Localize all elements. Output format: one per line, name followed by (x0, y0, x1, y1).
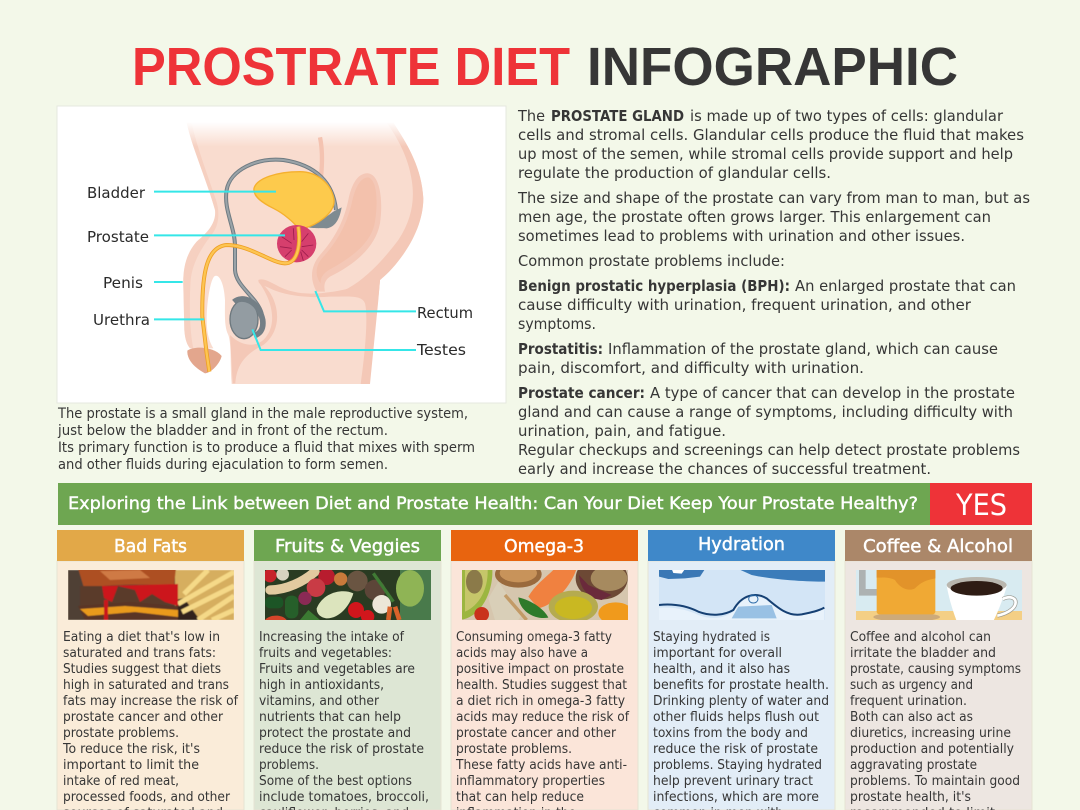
text: bad fats: To reduce the risk, it's (62, 742, 200, 757)
text: omega-3: health. Studies suggest that (456, 678, 627, 693)
text block: prostate gland description: pain, discomfort, and difficulty with urination. (518, 359, 864, 377)
text block: prostate gland description: Regular checkups and screenings can help detect prostate problems (518, 441, 1020, 459)
text block: prostate gland description: regulate the production of glandular cells. (518, 164, 831, 182)
text: bad fats: fats may increase the risk of (63, 694, 238, 709)
text block: prostate gland description: urination, pain, and fatigue. (518, 422, 726, 440)
anatomy labels: Bladder (87, 184, 146, 202)
text: omega-3: prostate problems. (456, 742, 572, 757)
text block: prostate caption: Its primary function is to produce a fluid that mixes with sperm (58, 440, 475, 456)
title: INFOGRAPHIC (587, 37, 958, 97)
text: omega-3 (455, 630, 629, 810)
vas deferens (226, 160, 336, 313)
text block: prostate gland description: The size and shape of the prostate can vary from man to man, but as (517, 189, 1030, 207)
anatomy labels: Rectum (417, 304, 473, 322)
ureter (320, 137, 322, 182)
text: hydration: Drinking plenty of water and (653, 694, 829, 709)
text: coffee and alcohol: frequent urination. (850, 694, 967, 709)
text: hydration: reduce the risk of prostate (653, 742, 818, 757)
text block: prostate caption: just below the bladder and in front of the rectum. (57, 423, 388, 439)
text: omega-3: a diet rich in omega-3 fatty (456, 694, 625, 709)
text block: prostate gland description: up most of the semen, while stromal cells provide support and help (518, 145, 1013, 163)
text block: prostate caption: and other fluids during ejaculation to form semen. (58, 457, 388, 473)
text: omega-3: These fatty acids have anti- (455, 758, 627, 773)
text: fruits and veggies: problems. (259, 758, 319, 773)
text: coffee and alcohol: production and potentially (850, 742, 1014, 757)
text: hydration: toxins from the body and (653, 726, 808, 741)
text block: prostate caption (57, 406, 475, 473)
text block: prostate gland description: cause difficulty with urination, frequent urination, and other (518, 296, 972, 314)
text: coffee and alcohol: diuretics, increasing urine (850, 726, 1011, 741)
text: hydration: help prevent urinary tract (653, 774, 813, 789)
text: bad fats: high in saturated and trans (63, 678, 229, 693)
text: hydration: problems. Staying hydrated (653, 758, 822, 773)
text: hydration: important for overall (653, 646, 782, 661)
anatomy labels: Urethra (93, 311, 150, 329)
heading: omega-3: Omega-3 (504, 537, 584, 557)
text: fruits and veggies: nutrients that can help (259, 710, 401, 725)
text: omega-3: acids may reduce the risk of (456, 710, 629, 725)
text: bad fats: prostate problems. (63, 726, 179, 741)
panel: anatomy diagram (57, 106, 506, 403)
text block: prostate gland description: A type of cancer that can develop in the prostate (650, 384, 1015, 402)
text block: prostate gland description: early and increase the chances of successful treatment. (518, 460, 931, 478)
text: bad fats: prostate cancer and other (63, 710, 224, 725)
illustration: male reproductive system (154, 123, 423, 384)
anatomy labels: Penis (103, 274, 143, 292)
text: bad fats (62, 630, 238, 810)
text: coffee and alcohol: Coffee and alcohol can (850, 630, 991, 645)
title: PROSTRATE DIET (132, 37, 570, 97)
text: hydration: benefits for prostate health. (653, 678, 829, 693)
bladder (254, 172, 334, 228)
testis (230, 300, 258, 339)
heading: coffee and alcohol: Coffee & Alcohol (863, 537, 1013, 557)
image: omega-3 foods (462, 570, 628, 620)
text: bad fats: important to limit the (63, 758, 199, 773)
banner: diet and prostate health question: YES (955, 488, 1007, 522)
text: fruits and veggies: reduce the risk of prostate (259, 742, 424, 757)
text block: prostate gland description: sometimes lead to problems with urination and other issues. (518, 227, 965, 245)
text: fruits and veggies: Fruits and vegetables are (259, 662, 415, 677)
text: bad fats: processed foods, and other (63, 790, 231, 805)
text: hydration (653, 630, 829, 810)
banner: diet and prostate health question: Exploring the Link between Diet and Prostate Health: Can Your Diet Keep Your Prostate Healthy? (68, 494, 918, 514)
text: fruits and veggies (259, 630, 429, 810)
heading: bad fats: Bad Fats (114, 537, 187, 557)
text: coffee and alcohol: Both can also act as (850, 710, 973, 725)
text block: prostate gland description: gland and can cause a range of symptoms, including difficulty with (518, 403, 1013, 421)
text block: prostate gland description: The (517, 107, 545, 125)
text: coffee and alcohol: such as urgency and (850, 678, 973, 693)
image: beer and coffee (855, 568, 1023, 622)
text: hydration: infections, which are more (653, 790, 819, 805)
text: hydration: Staying hydrated is (653, 630, 770, 645)
panel: coffee and alcohol (845, 530, 1032, 810)
text: coffee and alcohol (850, 630, 1021, 810)
text: bad fats: Eating a diet that's low in (63, 630, 220, 645)
text: fruits and veggies: protect the prostate and (259, 726, 411, 741)
text: omega-3: acids may also have a (456, 646, 588, 661)
text block: prostate gland description: PROSTATE GLAND (551, 107, 684, 125)
text: omega-3: that can help reduce (456, 790, 584, 805)
text: omega-3: prostate cancer and other (456, 726, 617, 741)
text: hydration: health, and it also has (653, 662, 790, 677)
text block: prostate gland description: is made up of two types of cells: glandular (690, 107, 1004, 125)
anatomy labels (87, 184, 473, 359)
image: vegetables (265, 570, 431, 620)
text: fruits and veggies: fruits and vegetables: (259, 646, 392, 661)
panel: hydration (648, 530, 835, 810)
text: fruits and veggies: Some of the best options (259, 774, 412, 789)
text block: prostate gland description: Benign prostatic hyperplasia (BPH): (518, 277, 790, 295)
text: fruits and veggies: include tomatoes, broccoli, (259, 790, 429, 805)
cyan pointer lines (154, 192, 416, 350)
text block: prostate gland description: men age, the prostate often grows larger. This enlargement can (518, 208, 991, 226)
text: coffee and alcohol: prostate, causing symptoms (850, 662, 1021, 677)
panel: bad fats (57, 530, 244, 810)
panel: fruits and veggies (254, 530, 441, 810)
rectum (312, 173, 381, 292)
heading: fruits and veggies: Fruits & Veggies (275, 537, 420, 557)
text block: prostate gland description: An enlarged prostate that can (795, 277, 1016, 295)
anatomy labels: Testes (416, 341, 466, 359)
penis glans (187, 348, 222, 373)
text block: prostate gland description: Prostatitis: (518, 340, 603, 358)
prostate gland (277, 225, 316, 262)
title (132, 37, 958, 97)
image: burger and fries (68, 568, 234, 620)
shading: perineum and leg (258, 279, 380, 384)
text block: prostate gland description: cells and stromal cells. Glandular cells produce the fluid that makes (518, 126, 1024, 144)
text: fruits and veggies: high in antioxidants, (259, 678, 384, 693)
text: bad fats: intake of red meat, (63, 774, 179, 789)
text block: prostate gland description: Prostate cancer: (518, 384, 645, 402)
text: coffee and alcohol: problems. To maintain good (850, 774, 1020, 789)
text: coffee and alcohol: irritate the bladder and (850, 646, 996, 661)
panel: omega-3 (451, 530, 638, 810)
banner: diet and prostate health question (58, 483, 1032, 525)
image: water (657, 568, 827, 622)
text: omega-3: inflammatory properties (456, 774, 605, 789)
text: fruits and veggies: vitamins, and other (259, 694, 380, 709)
urethra (202, 227, 299, 372)
text: fruits and veggies: Increasing the intake of (259, 630, 404, 645)
text block: prostate gland description: Inflammation of the prostate gland, which can cause (608, 340, 998, 358)
text block: prostate gland description: symptoms. (518, 315, 596, 333)
seminal vesicle (307, 207, 342, 228)
text: bad fats: saturated and trans fats: (63, 646, 216, 661)
anatomy labels: Prostate (87, 228, 149, 246)
heading: hydration: Hydration (698, 535, 785, 555)
text: omega-3: Consuming omega-3 fatty (456, 630, 612, 645)
text: omega-3: positive impact on prostate (456, 662, 624, 677)
text block: prostate gland description: Common prostate problems include: (518, 252, 785, 270)
text block: prostate caption: The prostate is a small gland in the male reproductive system, (57, 406, 468, 422)
text: coffee and alcohol: aggravating prostate (850, 758, 977, 773)
text: coffee and alcohol: prostate health, it's (850, 790, 971, 805)
text: bad fats: Studies suggest that diets (63, 662, 221, 677)
text block: prostate gland description (517, 107, 1030, 478)
text: hydration: other fluids helps flush out (653, 710, 819, 725)
